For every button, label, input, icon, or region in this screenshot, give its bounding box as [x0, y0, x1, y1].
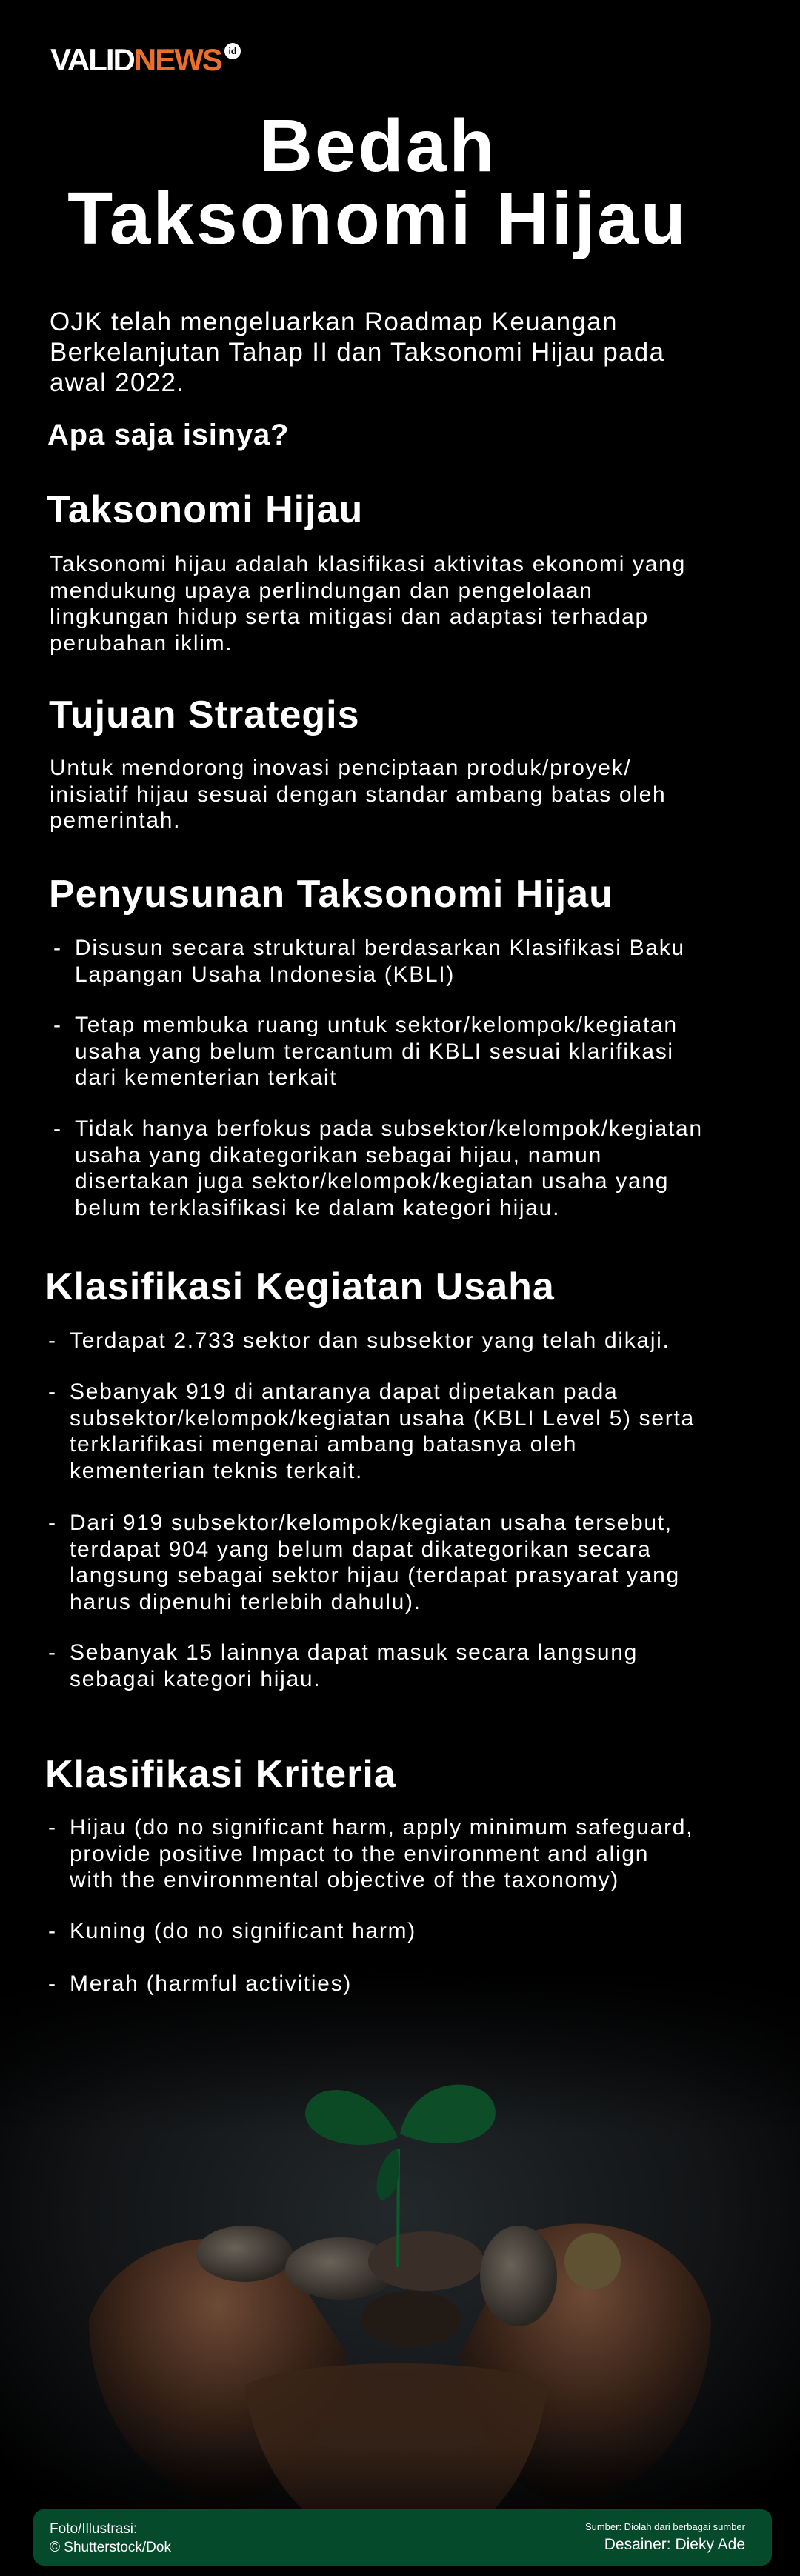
list: penyusunan — [53, 936, 703, 1219]
list: penyusunan: Disusun secara struktural berdasarkan Klasifikasi Baku — [75, 936, 685, 960]
list: penyusunan: Tidak hanya berfokus pada subsektor/kelompok/kegiatan — [75, 1116, 703, 1141]
text: definition — [50, 552, 686, 655]
intro text: OJK telah mengeluarkan Roadmap Keuangan — [50, 307, 618, 336]
list: kegiatan usaha: - — [48, 1511, 57, 1535]
list: kegiatan usaha — [48, 1328, 695, 1691]
list: kriteria: Hijau (do no significant harm, apply minimum safeguard, — [70, 1815, 693, 1840]
list: kegiatan usaha: - — [48, 1640, 57, 1665]
list: penyusunan: - — [53, 1116, 62, 1141]
credit: photo — [50, 2521, 171, 2555]
heading: Penyusunan Taksonomi Hijau: Penyusunan Taksonomi Hijau — [49, 873, 613, 916]
list: kegiatan usaha: - — [48, 1328, 57, 1353]
text: tujuan: Untuk mendorong inovasi penciptaan produk/proyek/ — [50, 756, 631, 780]
logo: VALIDNEWS.id: id — [229, 46, 236, 56]
intro text: Berkelanjutan Tahap II dan Taksonomi Hijau pada — [50, 338, 664, 367]
list: penyusunan: usaha yang belum tercantum di KBLI sesuai klarifikasi — [75, 1039, 674, 1064]
list: kriteria: with the environmental objective of the taxonomy) — [70, 1868, 619, 1892]
list: kegiatan usaha: Terdapat 2.733 sektor dan subsektor yang telah dikaji. — [70, 1328, 670, 1353]
heading: Taksonomi Hijau: Taksonomi Hijau — [47, 488, 363, 531]
list: kegiatan usaha: terklarifikasi mengenai ambang batasnya oleh — [70, 1432, 577, 1457]
list: kriteria: - — [48, 1815, 57, 1840]
list: kegiatan usaha: harus dipenuhi terlebih dahulu). — [70, 1590, 421, 1614]
list: penyusunan: dari kementerian terkait — [75, 1065, 337, 1090]
subheading: Apa saja isinya: Apa saja isinya? — [47, 419, 289, 451]
credit: photo: © Shutterstock/Dok — [50, 2540, 171, 2555]
list: penyusunan: Tetap membuka ruang untuk sektor/kelompok/kegiatan — [75, 1013, 678, 1037]
list: kriteria: Kuning (do no significant harm) — [70, 1919, 416, 1943]
title — [67, 104, 688, 260]
credit: source and designer: Desainer: Dieky Ade — [604, 2536, 745, 2553]
text: definition: Taksonomi hijau adalah klasifikasi aktivitas ekonomi yang — [50, 552, 686, 576]
list: kriteria: Merah (harmful activities) — [70, 1971, 352, 1996]
list: penyusunan: - — [53, 1013, 62, 1037]
footer: credits — [33, 2509, 772, 2566]
text: definition: perubahan iklim. — [50, 631, 233, 655]
list: penyusunan: usaha yang dikategorikan sebagai hijau, namun — [75, 1142, 602, 1168]
list: penyusunan: - — [53, 936, 62, 960]
list: kriteria — [48, 1815, 693, 1996]
text: definition: lingkungan hidup serta mitigasi dan adaptasi terhadap — [50, 605, 649, 629]
list: kegiatan usaha: terdapat 904 yang belum dapat dikategorikan secara — [70, 1537, 651, 1562]
intro text — [50, 307, 664, 397]
text: tujuan: pemerintah. — [50, 808, 181, 833]
text: definition: mendukung upaya perlindungan dan pengelolaan — [50, 578, 593, 603]
list: kegiatan usaha: kementerian teknis terkait. — [70, 1458, 363, 1483]
list: kegiatan usaha: subsektor/kelompok/kegiatan usaha (KBLI Level 5) serta — [70, 1406, 695, 1430]
list: penyusunan: disertakan juga sektor/kelompok/kegiatan usaha yang — [75, 1169, 669, 1194]
text: tujuan — [50, 756, 666, 833]
list: kegiatan usaha: sebagai kategori hijau. — [70, 1667, 321, 1691]
text: tujuan: inisiatif hijau sesuai dengan standar ambang batas oleh — [50, 782, 666, 806]
list: kegiatan usaha: Dari 919 subsektor/kelompok/kegiatan usaha tersebut, — [70, 1511, 673, 1535]
list: kriteria: provide positive Impact to the environment and align — [70, 1842, 649, 1866]
list: kriteria: - — [48, 1971, 57, 1996]
list: penyusunan: Lapangan Usaha Indonesia (KBLI) — [75, 962, 455, 987]
list: penyusunan: belum terklasifikasi ke dalam kategori hijau. — [75, 1196, 560, 1219]
title: Taksonomi Hijau — [67, 177, 688, 260]
photo: hands holding coins with sprout — [0, 2022, 800, 2509]
credit: source and designer — [585, 2521, 745, 2553]
heading: Klasifikasi Kegiatan Usaha: Klasifikasi Kegiatan Usaha — [45, 1265, 555, 1308]
list: kegiatan usaha: Sebanyak 15 lainnya dapat masuk secara langsung — [70, 1640, 638, 1665]
list: kegiatan usaha: langsung sebagai sektor hijau (terdapat prasyarat yang — [70, 1563, 680, 1588]
list: kriteria: - — [48, 1919, 57, 1943]
heading: Tujuan Strategis: Tujuan Strategis — [49, 693, 360, 736]
list: kegiatan usaha: Sebanyak 919 di antaranya dapat dipetakan pada — [70, 1379, 618, 1404]
credit: source and designer: Sumber: Diolah dari berbagai sumber — [585, 2521, 745, 2532]
list: kegiatan usaha: - — [48, 1379, 57, 1404]
intro text: awal 2022. — [50, 368, 184, 397]
credit: photo: Foto/Illustrasi: — [50, 2521, 137, 2537]
heading: Klasifikasi Kriteria: Klasifikasi Kriteria — [45, 1753, 396, 1796]
logo: VALIDNEWS.id: VALIDNEWS — [50, 42, 221, 77]
title: Bedah — [259, 104, 496, 187]
